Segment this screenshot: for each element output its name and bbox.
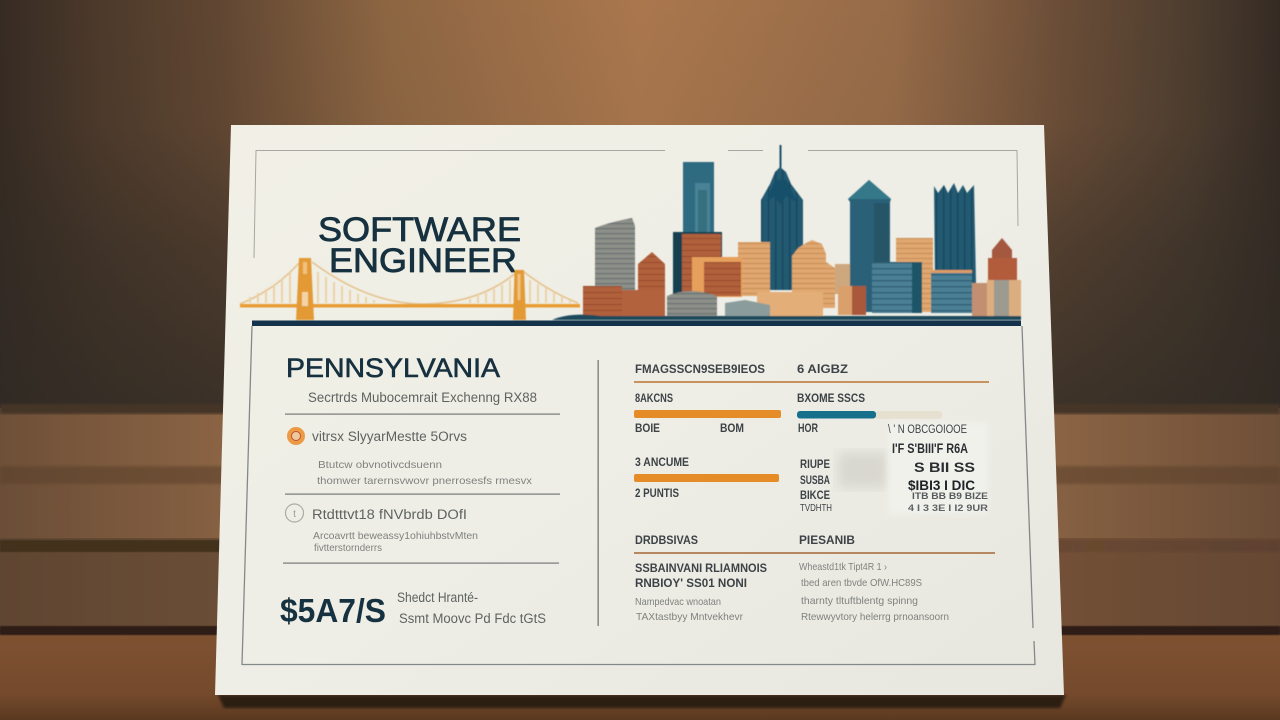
bar three faded track bbox=[875, 411, 942, 419]
building: right small tan bbox=[972, 283, 987, 318]
icon: outline badge bbox=[286, 504, 304, 522]
data table block: \ ' N OBCGOIOOE bbox=[888, 424, 967, 436]
bar one bbox=[634, 410, 781, 418]
building: domed low building bbox=[667, 291, 717, 318]
building: stepped tan bbox=[792, 240, 835, 308]
title: software engineer: ENGINEER bbox=[329, 242, 517, 280]
data labels: TVDHTH bbox=[800, 503, 832, 514]
upper frame lines bbox=[254, 150, 1018, 258]
item one line two: thomwer tarernsvwovr pnerrosesfs rmesvx bbox=[317, 475, 533, 487]
building: teal upper tower bbox=[683, 162, 714, 234]
left block line three: Nampedvac wnoatan bbox=[635, 596, 721, 608]
data labels bbox=[800, 459, 832, 514]
column divider bbox=[598, 360, 599, 626]
smudged area bbox=[838, 452, 888, 488]
section rule bbox=[634, 381, 989, 383]
building: tan right block bbox=[896, 238, 933, 312]
paper card bbox=[215, 125, 1064, 695]
building: crown tower bbox=[934, 183, 976, 283]
data table block: $IBI3 I DIC bbox=[908, 477, 975, 493]
right block line three: tharnty tltuftblentg spinng bbox=[801, 595, 918, 607]
building: low tan hall bbox=[757, 292, 823, 318]
building: right brick bbox=[838, 286, 866, 315]
data table block: S BII SS bbox=[914, 459, 975, 475]
building: small gray bbox=[725, 300, 770, 318]
section heading right: 6 AlGBZ bbox=[797, 364, 848, 376]
bar one values: BOIE bbox=[635, 423, 660, 435]
left block bold line one: SSBAINVANI RLIAMNOIS bbox=[635, 563, 767, 575]
building: brick with orange frame bbox=[692, 257, 742, 297]
bar one values: BOM bbox=[720, 423, 744, 435]
data table block: ITB BB B9 BIZE bbox=[912, 491, 988, 501]
lower frame bbox=[242, 326, 1035, 664]
city skyline bbox=[552, 145, 1021, 320]
icon: suspension bridge bbox=[240, 258, 580, 320]
bar three value: HOR bbox=[798, 423, 819, 435]
building: dark base tower bbox=[673, 232, 722, 296]
building: gray office tower bbox=[595, 218, 635, 290]
dark header bar bbox=[252, 320, 1021, 326]
building: teal block bbox=[872, 262, 922, 313]
salary note line two: Ssmt Moovc Pd Fdc tGtS bbox=[399, 611, 546, 626]
wooden table bbox=[0, 404, 1280, 720]
item two line two: fivtterstornderrs bbox=[314, 542, 382, 554]
bar three bbox=[797, 411, 876, 418]
data table block: I'F S'BIII'F R6A bbox=[892, 441, 968, 456]
item one heading: vitrsx SlyyarMestte 5Orvs bbox=[312, 429, 467, 444]
bar two value: 2 PUNTIS bbox=[635, 488, 679, 500]
bar one values bbox=[635, 423, 744, 435]
subtitle: Secrtrds Mubocemrait Exchenng RX88 bbox=[308, 390, 537, 405]
bar two bbox=[634, 474, 779, 482]
salary figure: $5A7/S bbox=[280, 592, 386, 629]
bar three label: BXOME SSCS bbox=[797, 393, 865, 405]
bar two label: 3 ANCUME bbox=[635, 457, 689, 469]
divider three bbox=[283, 562, 559, 564]
bar one label: 8AKCNS bbox=[635, 393, 673, 405]
left column bbox=[280, 353, 560, 629]
right block line one: Wheastd1tk Tipt4R 1 › bbox=[799, 561, 887, 573]
building: rear tan bbox=[835, 264, 850, 294]
title: software engineer: SOFTWARE bbox=[318, 211, 521, 249]
title: software engineer bbox=[318, 211, 521, 280]
right column bottom section bbox=[634, 535, 995, 623]
heading: pennsylvania: PENNSYLVANIA bbox=[286, 353, 500, 383]
building: far right tower bbox=[987, 238, 1021, 319]
building: low brick right bbox=[622, 290, 665, 318]
building: tan mid tower bbox=[738, 242, 770, 296]
building: pyramid tower bbox=[848, 180, 891, 312]
building: teal block right bbox=[931, 270, 972, 313]
data table block bbox=[888, 422, 988, 514]
data labels: BIKCE bbox=[800, 490, 830, 502]
data labels: RIUPE bbox=[800, 459, 830, 471]
item two line one: Arcoavrtt beweassy1ohiuhbstvMten bbox=[313, 530, 478, 542]
icon: outline badge: t bbox=[293, 509, 296, 520]
left block line four: TAXtastbyy Mntvekhevr bbox=[636, 611, 743, 623]
right block line two: tbed aren tbvde OfW.HC89S bbox=[801, 577, 922, 589]
section rule bbox=[634, 552, 995, 554]
icon: orange badge bbox=[287, 427, 305, 445]
building: low brick left bbox=[583, 286, 622, 318]
divider two bbox=[285, 494, 560, 495]
right column top section bbox=[634, 364, 989, 514]
card shadow bbox=[218, 695, 1066, 708]
item one line one: Btutcw obvnotivcdsuenn bbox=[318, 459, 442, 471]
section heading left: FMAGSSCN9SEB9IEOS bbox=[635, 364, 765, 376]
data table block: 4 I 3 3E I I2 9UR bbox=[908, 503, 988, 514]
data labels: SUSBA bbox=[800, 475, 830, 487]
divider one bbox=[285, 414, 560, 415]
section heading left: DRDBSIVAS bbox=[635, 535, 698, 547]
item two heading: Rtdtttvt18 fNVbrdb DOfI bbox=[312, 507, 467, 522]
right block line four: Rtewwyvtory helerrg prnoansoorn bbox=[801, 611, 949, 623]
building: spire tower bbox=[761, 145, 803, 290]
salary note line one: Shedct Hranté- bbox=[397, 590, 478, 605]
background wall bbox=[0, 0, 1280, 412]
section heading right: PIESANIB bbox=[799, 535, 855, 547]
left block bold line two: RNBIOY' SS01 NONI bbox=[635, 578, 747, 590]
ground strip bbox=[552, 315, 1021, 320]
building: brown roofed tower bbox=[638, 252, 665, 318]
